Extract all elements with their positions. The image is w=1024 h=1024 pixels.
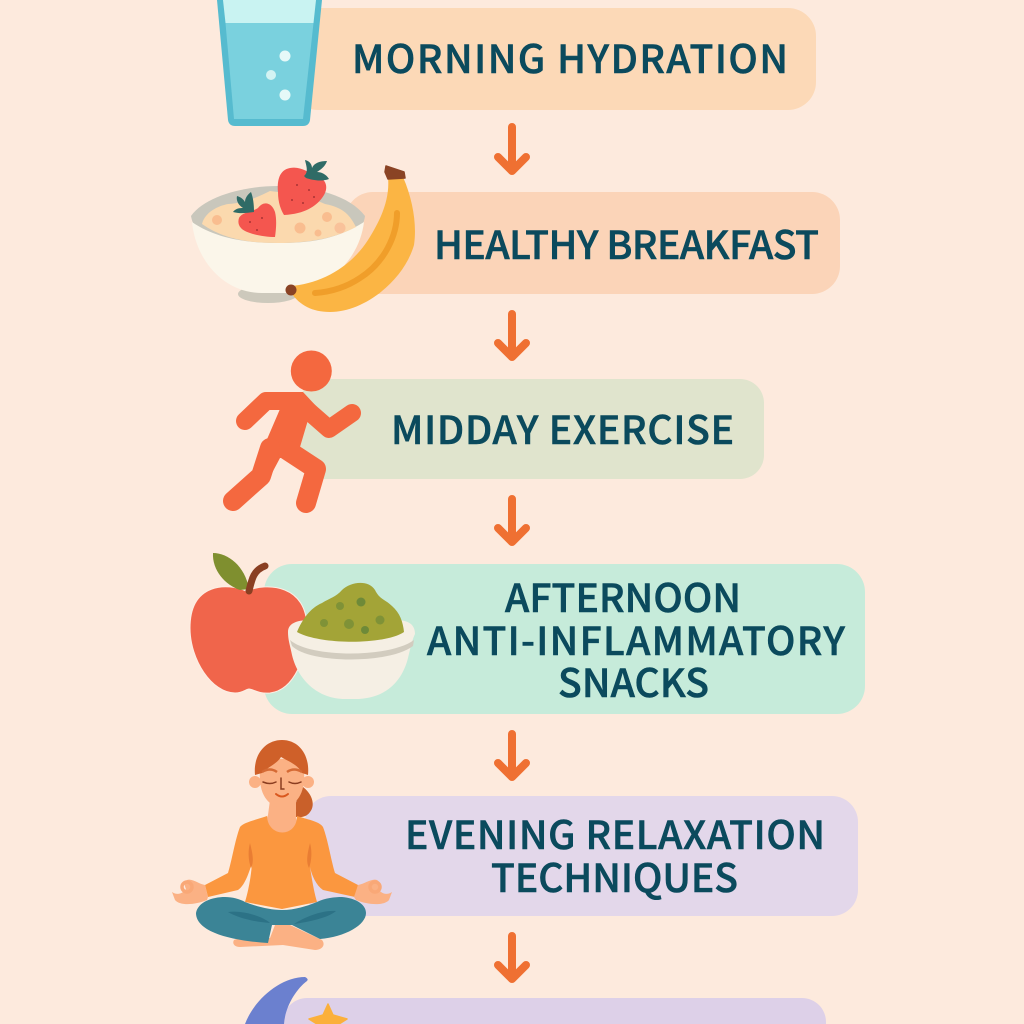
icon: glass of water	[217, 0, 322, 126]
heading: afternoon anti-inflammatory snacks: ANTI-INFLAMMATORY	[427, 611, 845, 667]
arrow 1	[498, 127, 526, 171]
heading: evening relaxation techniques: EVENING RELAXATION	[405, 805, 825, 861]
icon: meditating woman	[172, 740, 392, 950]
feet	[233, 925, 324, 950]
heading: evening relaxation techniques: TECHNIQUES	[491, 848, 738, 904]
face	[260, 759, 304, 807]
arrow 4	[498, 734, 526, 777]
ponytail	[293, 785, 313, 817]
neck	[265, 800, 299, 834]
icon: oatmeal bowl with strawberries	[191, 160, 415, 312]
heading: midday exercise: MIDDAY EXERCISE	[391, 400, 734, 456]
arrow 2	[498, 314, 526, 357]
heading: healthy breakfast: HEALTHY BREAKFAST	[434, 215, 819, 271]
icon: running figure	[233, 350, 352, 503]
heading: evening relaxation techniques	[405, 805, 825, 904]
torso and arms	[205, 816, 358, 909]
panel: sleep	[283, 998, 826, 1024]
panel: healthy breakfast	[345, 192, 840, 294]
panel: midday exercise	[300, 379, 764, 479]
heading: morning hydration: MORNING HYDRATION	[352, 29, 788, 85]
panel: evening relaxation	[305, 796, 858, 916]
panel: morning hydration	[290, 8, 816, 110]
icon: large strawberry	[278, 160, 329, 215]
icon: moon	[245, 977, 308, 1024]
icon: star	[309, 1004, 347, 1024]
arrow 5	[498, 936, 526, 979]
icon: apple	[190, 553, 307, 693]
left hand	[172, 880, 208, 904]
heading: afternoon anti-inflammatory snacks: SNACKS	[558, 653, 709, 709]
arrow 3	[498, 499, 526, 542]
icon: banana	[286, 166, 415, 312]
heading: afternoon anti-inflammatory snacks	[427, 568, 845, 709]
icon: green powder bowl	[288, 583, 415, 699]
icon: small strawberry	[233, 192, 276, 237]
legs	[196, 897, 366, 943]
right hand	[354, 880, 392, 904]
hair	[255, 740, 308, 775]
heading: afternoon anti-inflammatory snacks: AFTERNOON	[505, 568, 741, 624]
panel: afternoon snacks	[264, 564, 865, 714]
